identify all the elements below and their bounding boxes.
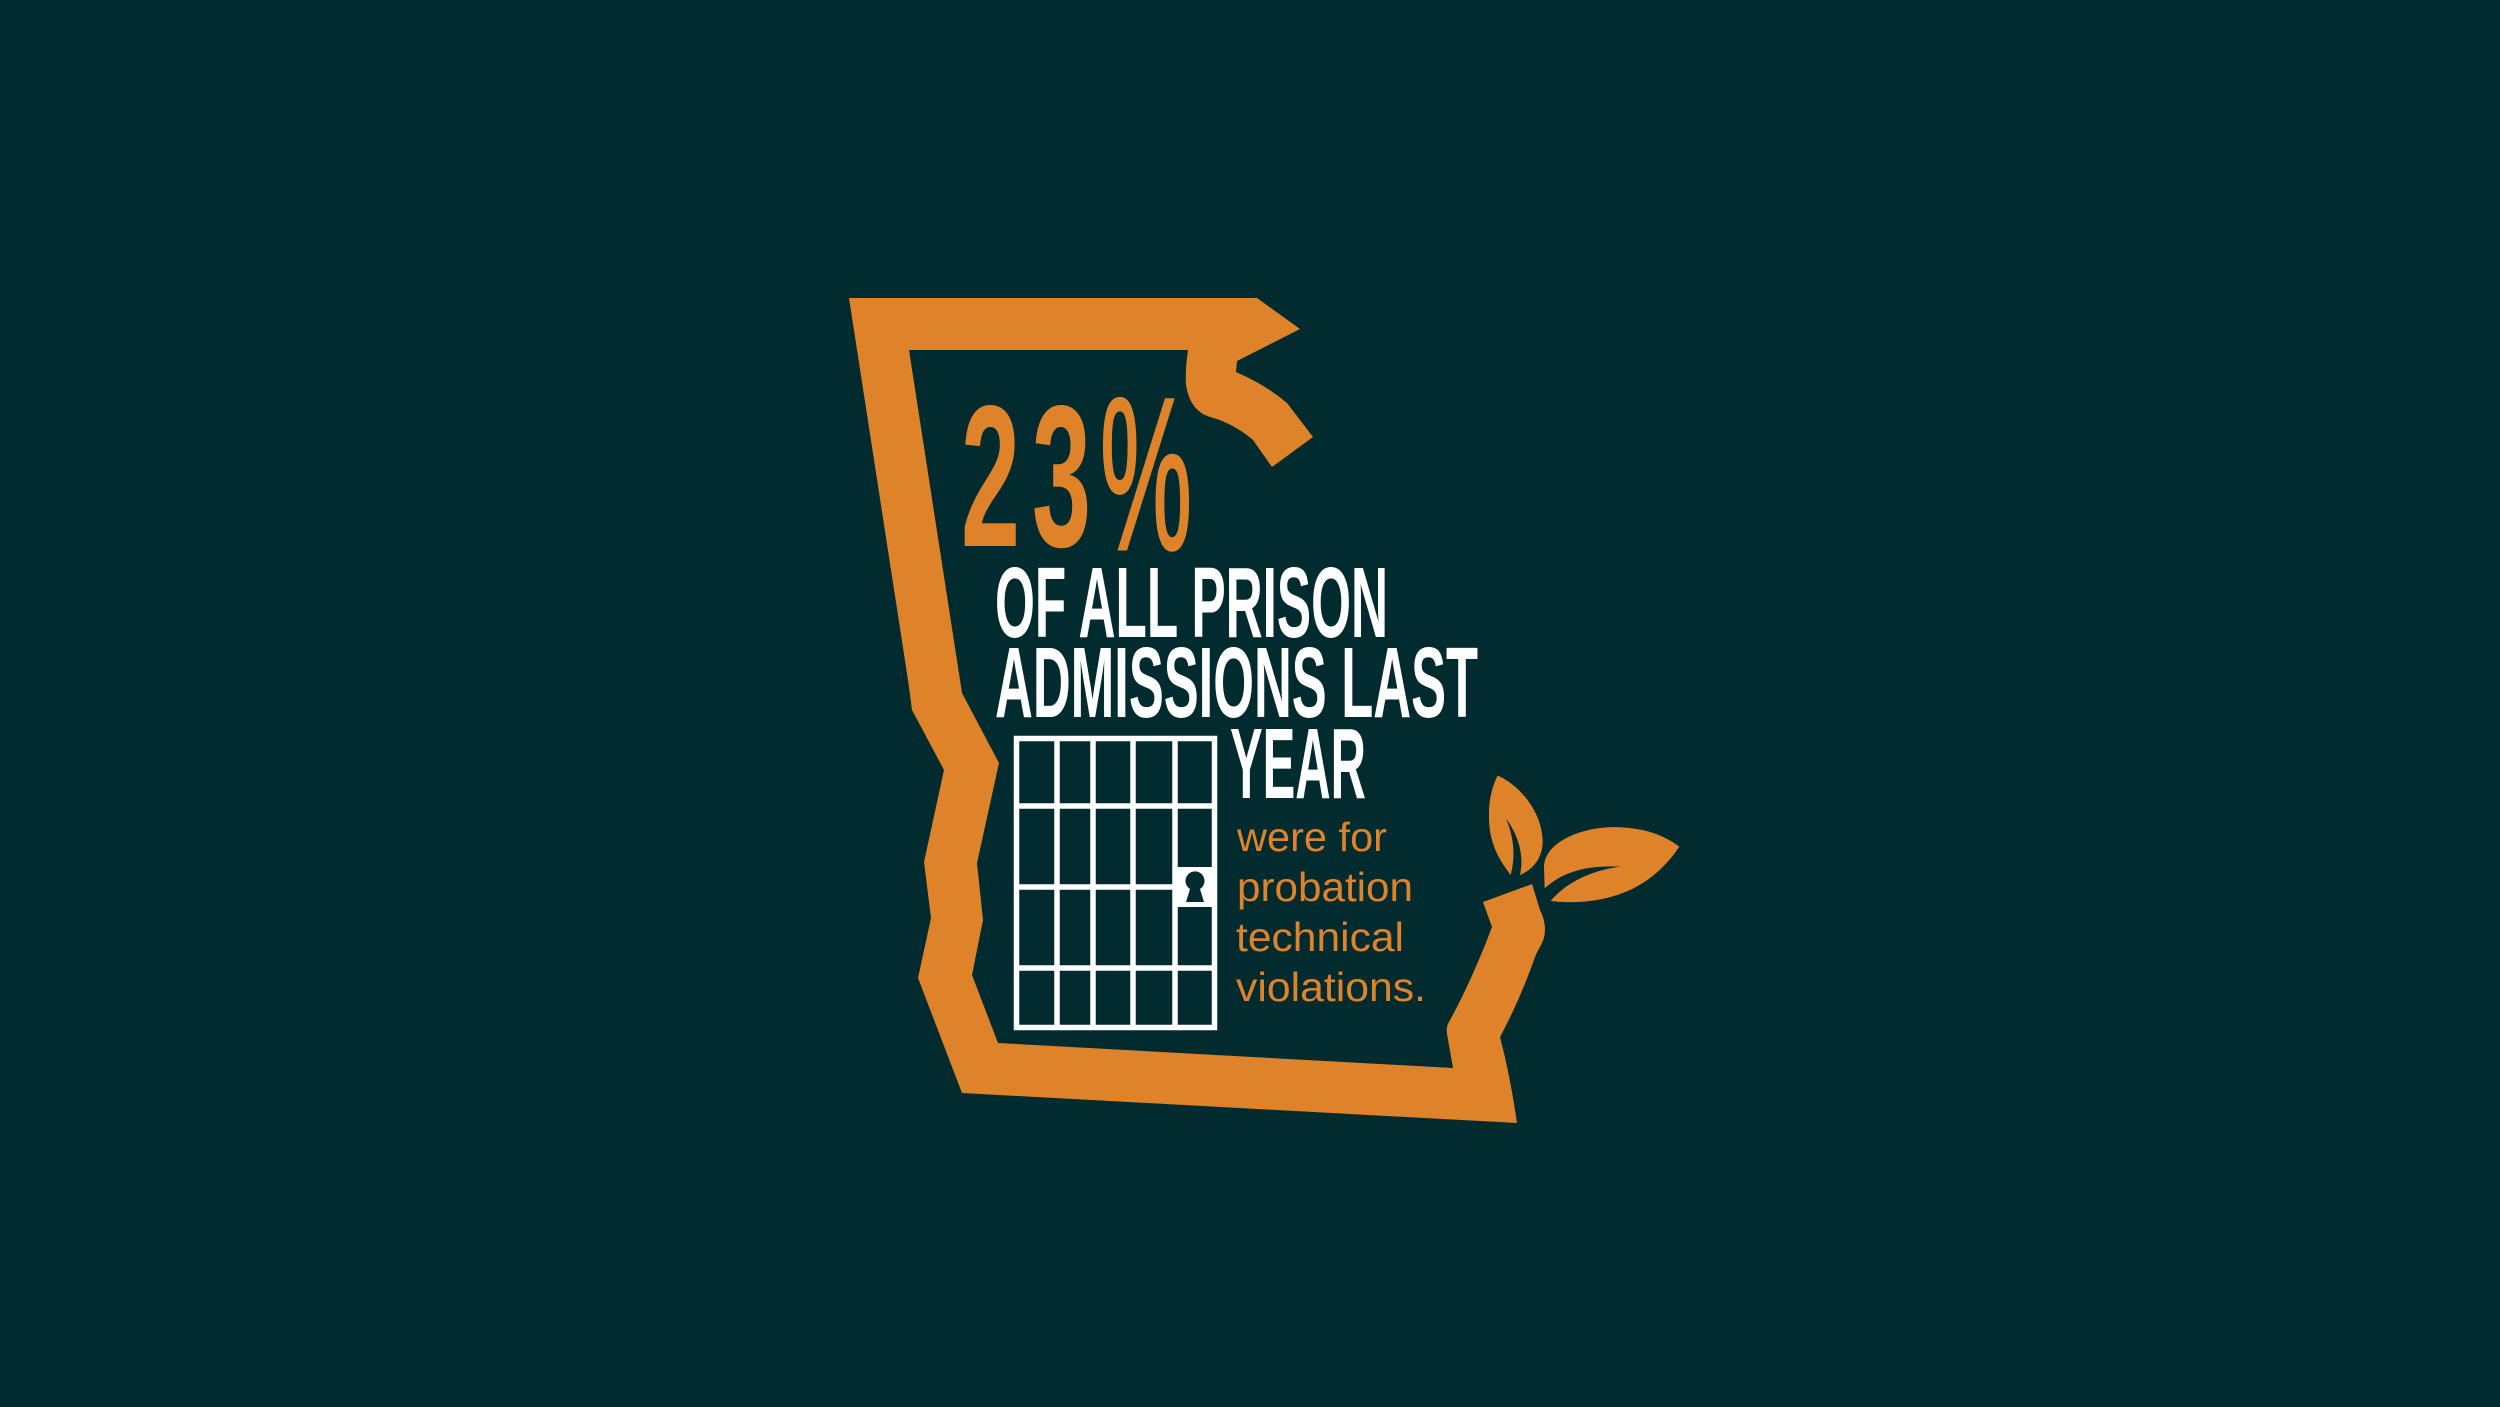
lock plate — [1175, 867, 1215, 907]
infographic canvas: % — [1100, 353, 1192, 595]
body text: were for probation technical violations: probation — [1237, 864, 1413, 910]
heading: of all prison admissions last year: ADMISSIONS LAST — [995, 627, 1478, 739]
statistic: 23%: 3 — [1032, 363, 1091, 589]
body text: were for probation technical violations: were for — [1236, 814, 1387, 860]
keyhole — [1186, 871, 1204, 902]
statistic: 23% — [961, 353, 1192, 595]
body text: were for probation technical violations: technical — [1236, 914, 1404, 960]
heading: of all prison admissions last year — [995, 547, 1478, 820]
state outline of Georgia — [849, 298, 1545, 1123]
heading: of all prison admissions last year: YEAR — [1230, 708, 1366, 820]
body text: were for probation technical violations: violations. — [1236, 964, 1426, 1010]
icon: jail cell door — [1016, 738, 1215, 1028]
statistic: 23%: 2 — [961, 363, 1020, 589]
right leaf — [1544, 827, 1679, 902]
icon: leaves — [1489, 776, 1679, 902]
body text: were for probation technical violations — [1236, 814, 1426, 1010]
upper leaf — [1489, 776, 1543, 875]
heading: of all prison admissions last year: OF ALL PRISON — [995, 547, 1388, 659]
